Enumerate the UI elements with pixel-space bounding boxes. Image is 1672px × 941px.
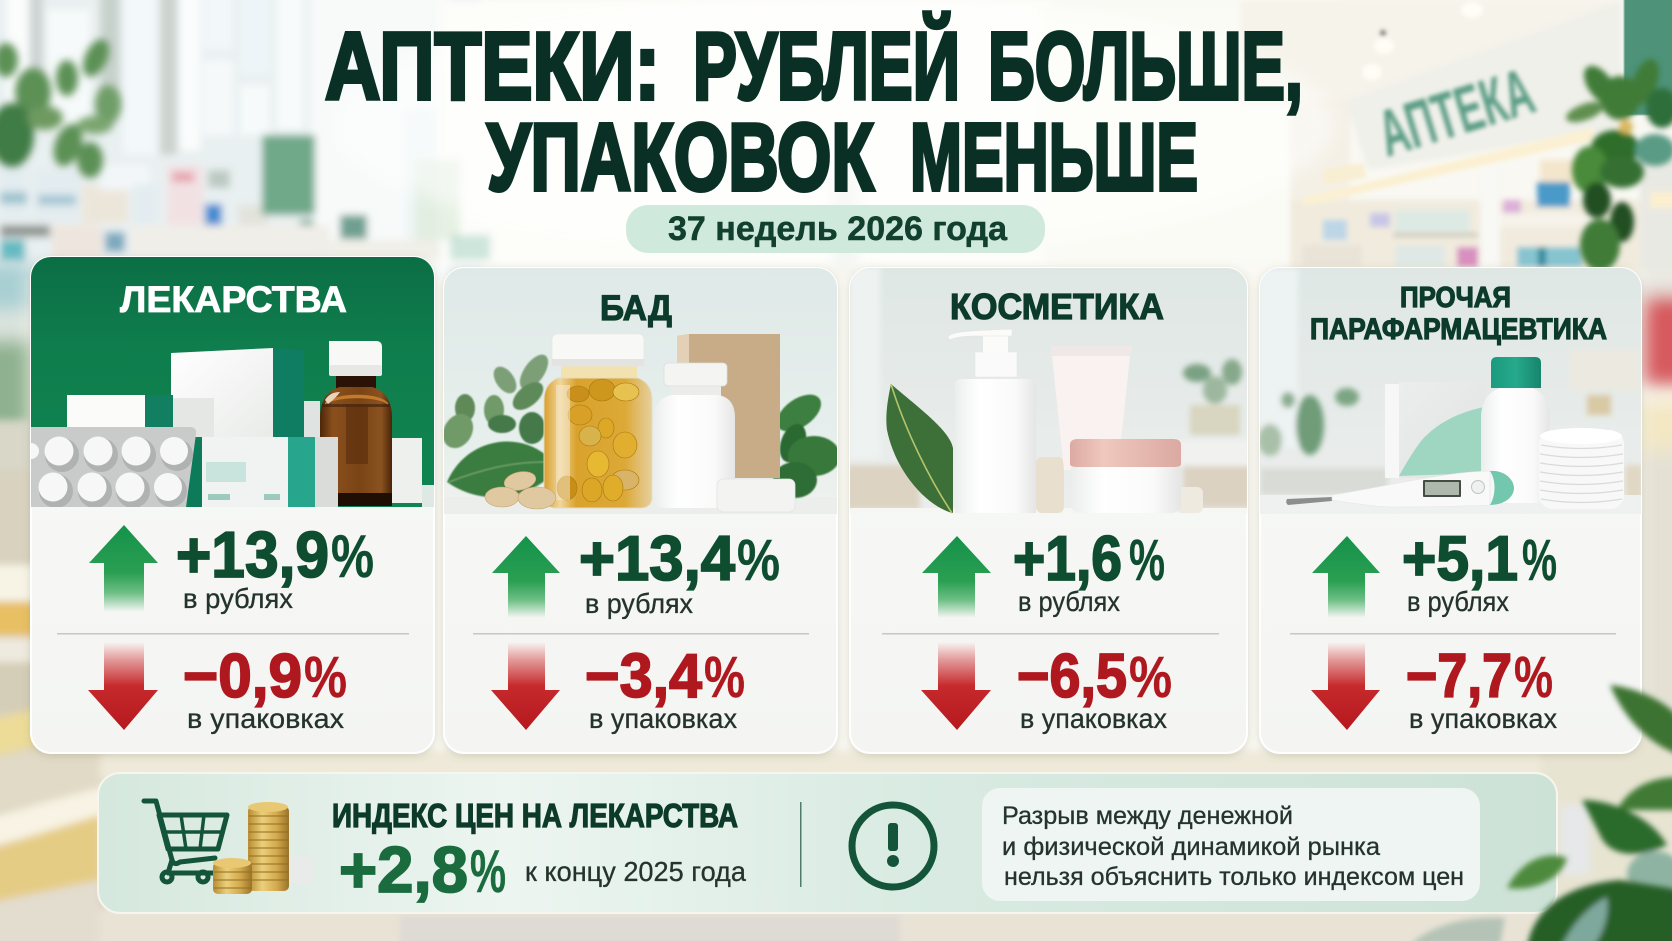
background: floor xyxy=(0,420,1672,941)
panel: price index and note xyxy=(98,773,1557,913)
rubles label: в рублях xyxy=(1407,586,1509,617)
panel: бад xyxy=(437,268,840,753)
amber bottle xyxy=(320,341,392,506)
background: haze behind title xyxy=(335,0,1335,250)
rubles change: +13,9 xyxy=(176,518,329,591)
big box xyxy=(171,348,304,437)
panel: прочая парафармацевтика xyxy=(1258,268,1643,753)
leaves xyxy=(437,350,840,498)
left box xyxy=(67,395,214,437)
teal-cap bottle xyxy=(1481,357,1542,503)
rubles label: в рублях xyxy=(585,588,693,619)
arrow down xyxy=(88,642,158,730)
rubles change: +5,1 xyxy=(1402,524,1518,594)
background: left plant xyxy=(0,35,121,178)
kraft box xyxy=(677,334,780,478)
callout line 2: и физической динамикой рынка xyxy=(1002,833,1380,861)
packs label: в упаковках xyxy=(589,703,737,734)
lid xyxy=(717,479,795,512)
title line 2: УПАКОВОК xyxy=(487,104,874,211)
front box xyxy=(188,437,338,507)
rubles label: в рублях xyxy=(183,583,293,614)
rubles change: +1,6 xyxy=(1013,524,1122,594)
arrow up xyxy=(89,525,158,612)
background: lights xyxy=(1302,2,1594,206)
packs change: % xyxy=(704,645,745,710)
arrow down xyxy=(1311,642,1380,730)
thermometer xyxy=(1286,471,1514,507)
tablets xyxy=(485,469,556,509)
packs label: в упаковках xyxy=(187,703,344,734)
panel: косметика xyxy=(845,268,1251,753)
rubles change: % xyxy=(1129,528,1165,593)
white bottle xyxy=(654,363,735,508)
index note: к концу 2025 года xyxy=(525,856,746,887)
packs change: −3,4 xyxy=(585,642,702,711)
icon: shopping cart xyxy=(144,801,227,882)
category heading xyxy=(1310,282,1607,346)
packs change: −7,7 xyxy=(1406,642,1512,711)
cotton pads xyxy=(1539,428,1624,509)
panel: лекарства xyxy=(23,257,436,753)
arrow up xyxy=(922,536,991,618)
illustration: medicines xyxy=(23,257,436,508)
background: sign text: АПТЕКА xyxy=(1369,53,1542,170)
tube xyxy=(1051,346,1132,470)
title xyxy=(325,11,1303,211)
rubles change: % xyxy=(331,523,374,590)
right box xyxy=(389,438,422,503)
icon: exclamation xyxy=(852,805,934,887)
index value: +2,8 xyxy=(339,833,468,906)
arrow up xyxy=(1312,536,1380,618)
packs change: % xyxy=(304,645,347,710)
rubles change: % xyxy=(1522,528,1557,593)
background: pharmacy ceiling and shelves xyxy=(1240,0,1672,270)
title line 1: РУБЛЕЙ xyxy=(693,11,960,120)
packs change: % xyxy=(1129,645,1172,710)
category heading: ПРОЧАЯ xyxy=(1400,282,1511,314)
period badge xyxy=(626,205,1045,253)
packs label: в упаковках xyxy=(1409,703,1557,734)
arrow up xyxy=(492,536,560,618)
packs change: % xyxy=(1514,645,1553,710)
foreground leaves over panel xyxy=(1410,856,1672,941)
illustration: cosmetics xyxy=(845,268,1251,514)
index value: % xyxy=(470,838,506,905)
pump bottle xyxy=(948,329,1036,513)
title line 1 xyxy=(325,11,1303,120)
rubles change: +13,4 xyxy=(579,524,735,594)
illustration: supplements xyxy=(437,268,840,514)
callout xyxy=(982,788,1480,901)
foreground leaves behind band xyxy=(1582,685,1672,899)
illustration: other parapharmacy xyxy=(1258,268,1643,514)
arrow down xyxy=(921,642,991,730)
period text: 37 недель 2026 года xyxy=(668,210,1008,248)
index heading: ИНДЕКС ЦЕН НА ЛЕКАРСТВА xyxy=(332,797,738,834)
callout line 3: нельзя объяснить только индексом цен xyxy=(1004,863,1464,891)
cream jar xyxy=(1070,439,1181,513)
title line 2: МЕНЬШЕ xyxy=(910,104,1198,211)
packs label: в упаковках xyxy=(1020,703,1167,734)
rubles label: в рублях xyxy=(1018,586,1120,617)
title line 1: БОЛЬШЕ, xyxy=(988,13,1303,120)
category heading: КОСМЕТИКА xyxy=(950,286,1164,327)
category heading: БАД xyxy=(600,289,672,328)
icon: coins and pills xyxy=(213,802,314,894)
category heading: ЛЕКАРСТВА xyxy=(120,279,347,320)
background: left shelves xyxy=(0,163,27,218)
packs change: −6,5 xyxy=(1017,642,1127,711)
title line 1: АПТЕКИ: xyxy=(325,13,660,120)
leaf xyxy=(886,384,953,513)
capsule jar xyxy=(544,334,652,508)
blister pack xyxy=(23,427,196,508)
lace sponge xyxy=(1036,457,1203,513)
packs change: −0,9 xyxy=(183,642,302,711)
callout line 1: Разрыв между денежной xyxy=(1002,802,1293,830)
background: right plant xyxy=(1563,55,1672,271)
rubles change: % xyxy=(737,528,780,593)
background: green wall xyxy=(1624,0,1672,115)
arrow down xyxy=(491,642,560,730)
box xyxy=(1385,382,1486,478)
category heading: ПАРАФАРМАЦЕВТИКА xyxy=(1310,313,1607,346)
